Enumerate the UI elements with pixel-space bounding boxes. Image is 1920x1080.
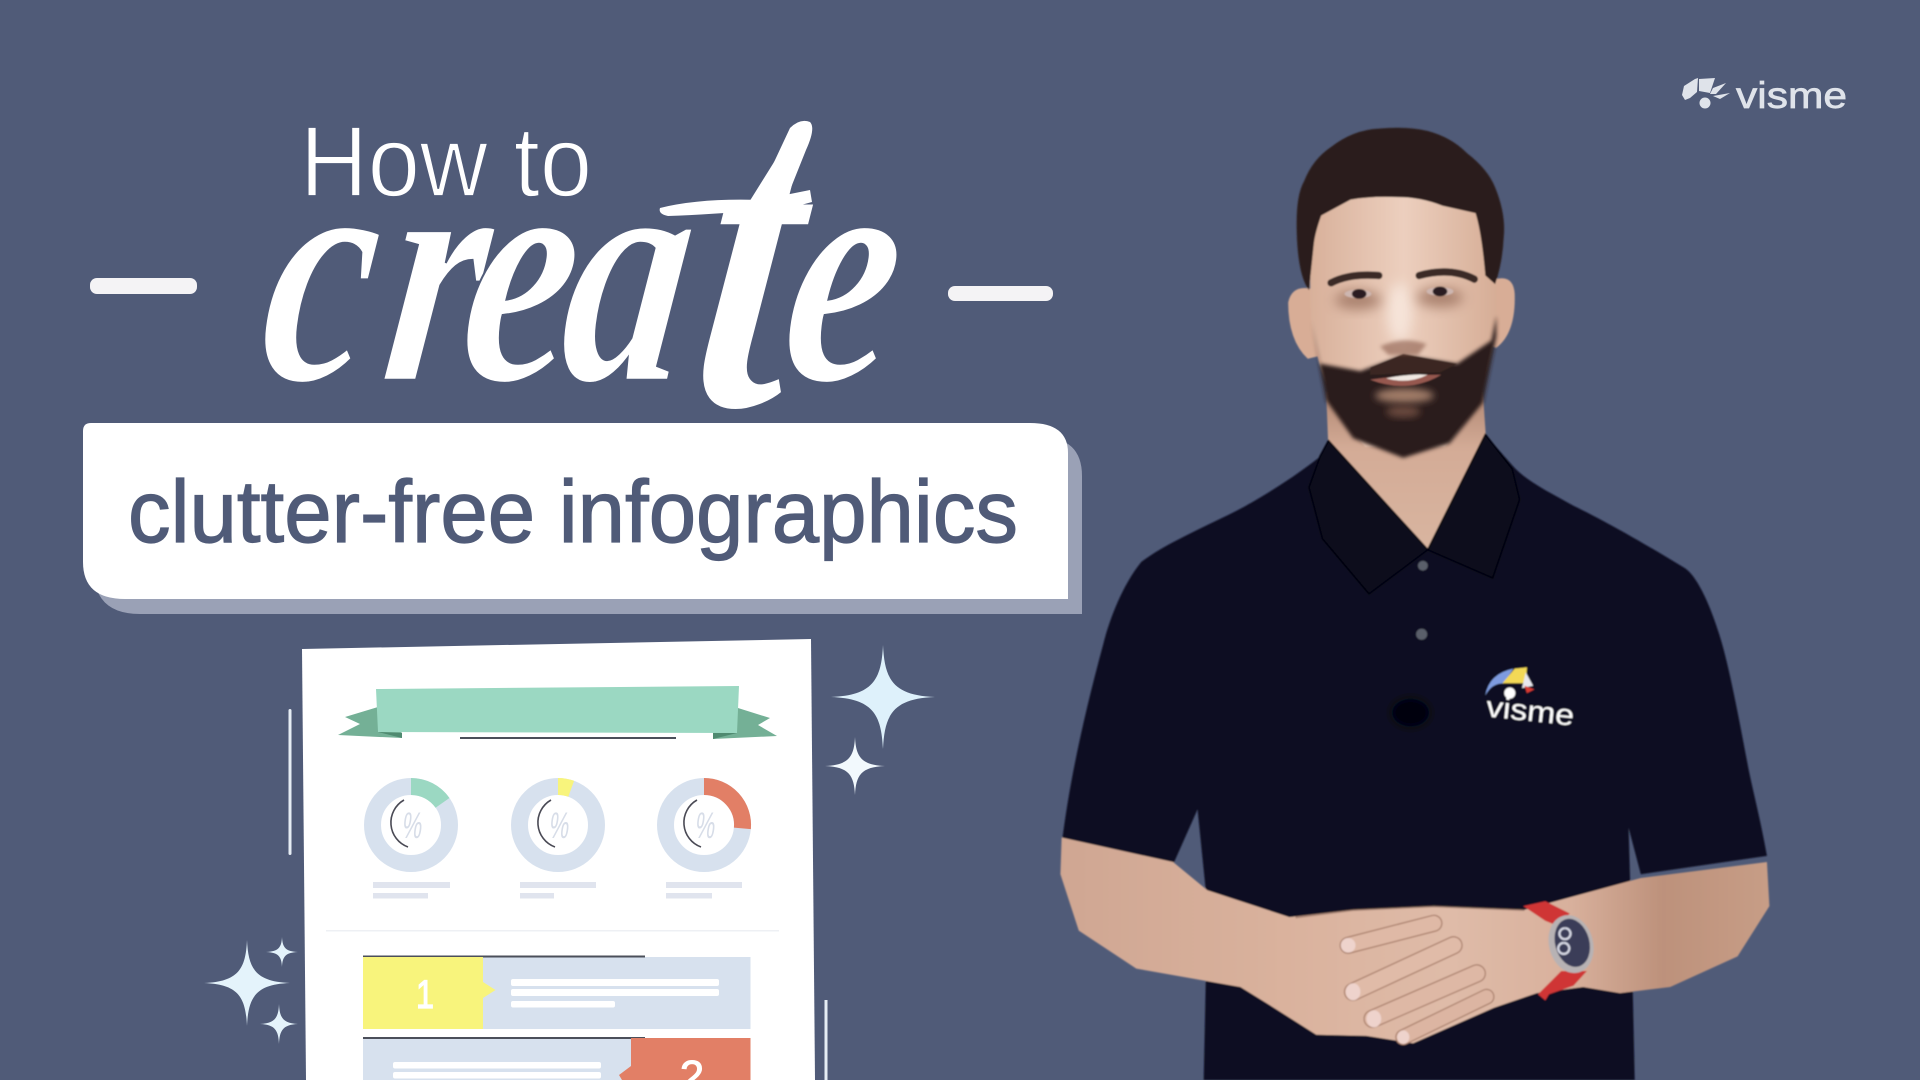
shirt xyxy=(1062,435,1767,1080)
title: create: a xyxy=(546,91,715,451)
subtitle text: clutter-free infographics xyxy=(128,462,1018,561)
sparkle large right xyxy=(831,645,935,749)
title: create xyxy=(240,12,933,502)
infographic sheet illustration xyxy=(302,639,815,1080)
right dash xyxy=(948,286,1053,301)
subtitle banner xyxy=(83,423,1082,614)
shirt logo: visme xyxy=(1485,690,1576,733)
paper xyxy=(302,639,815,1080)
donut chart 1: % xyxy=(400,804,426,846)
sparkle small left top xyxy=(266,937,298,967)
title: create: e xyxy=(446,91,601,451)
eyebrows xyxy=(1331,272,1474,283)
ribbon header xyxy=(338,686,777,739)
fingernails xyxy=(1341,938,1409,1044)
neck xyxy=(1326,392,1487,553)
ears xyxy=(1288,278,1515,359)
mouth xyxy=(1370,375,1441,386)
arms and hands xyxy=(1060,838,1769,1044)
title: create: e xyxy=(768,91,923,451)
donut chart 2 xyxy=(520,786,596,864)
visme logo xyxy=(1682,75,1847,116)
left dash xyxy=(90,278,197,294)
beard xyxy=(1311,316,1496,458)
donut chart 1 xyxy=(372,786,450,864)
presenter xyxy=(1060,128,1769,1080)
decorative sparkles and lines xyxy=(204,645,935,1080)
hair xyxy=(1297,128,1504,290)
logo wordmark: visme xyxy=(1736,75,1847,116)
shirt logo xyxy=(1485,667,1576,733)
donut chart 2: % xyxy=(547,804,573,846)
donut captions xyxy=(373,882,742,898)
donut chart 3: % xyxy=(693,804,719,846)
logo fan icon xyxy=(1682,78,1730,108)
eyes xyxy=(1345,287,1453,299)
sparkle small right xyxy=(825,737,885,795)
collar xyxy=(1309,435,1520,594)
title: How to: How to xyxy=(300,106,592,218)
donut chart 3 xyxy=(666,786,743,864)
fingers xyxy=(1348,923,1487,1037)
buttons xyxy=(1418,561,1428,571)
list row 1 xyxy=(363,956,750,1029)
brush swash on title xyxy=(660,121,812,216)
sparkle large left xyxy=(204,940,290,1026)
list row 2 xyxy=(363,1037,750,1080)
title: create: t xyxy=(675,12,841,502)
face xyxy=(1310,184,1497,447)
title: create: c xyxy=(246,91,401,451)
title: create: r xyxy=(369,91,515,451)
number 1: 1 xyxy=(416,973,434,1017)
eye sockets xyxy=(1335,288,1463,310)
nose highlight xyxy=(1387,283,1412,342)
wristwatch xyxy=(1523,901,1600,1000)
nose xyxy=(1380,340,1427,355)
sparkle small left bottom xyxy=(260,1004,298,1044)
lapel mic xyxy=(1391,698,1430,727)
